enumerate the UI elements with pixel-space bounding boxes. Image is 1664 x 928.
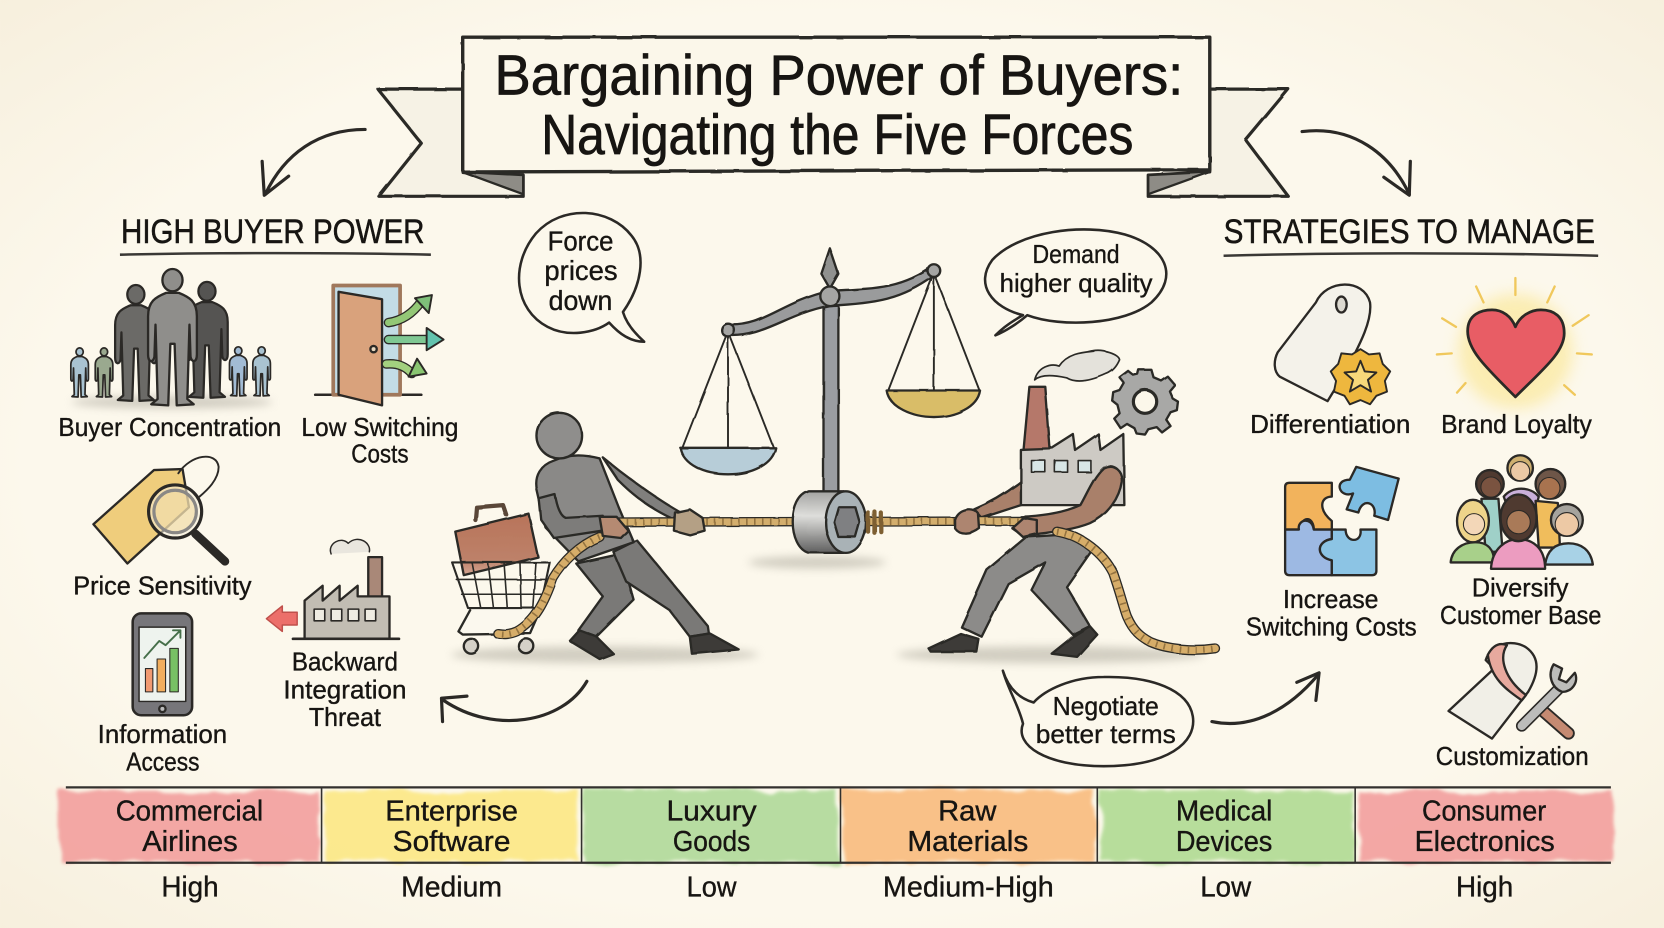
speech bubble: force prices down: prices	[544, 255, 618, 286]
label: backward integration threat	[283, 647, 406, 732]
illustration: factory-headed supplier figure	[929, 351, 1178, 657]
label: differentiation: Differentiation	[1250, 409, 1410, 439]
arrow: banner to strategies	[1302, 131, 1410, 195]
speech bubble: force prices down: Force	[548, 225, 613, 256]
speech bubble: negotiate better terms: better terms	[1036, 719, 1176, 749]
illustration: shopping cart with briefcase	[452, 505, 550, 654]
column: luxury goods	[666, 795, 757, 904]
label: increase switching costs: Switching Costs	[1246, 612, 1417, 642]
column: commercial airlines: High	[161, 872, 219, 904]
label: customization: Customization	[1436, 741, 1589, 771]
column: commercial airlines: Airlines	[142, 826, 238, 858]
heading: high buyer power: HIGH BUYER POWER	[121, 213, 425, 251]
buyer near arm	[539, 495, 603, 538]
icon: factory with red arrow	[266, 539, 399, 639]
table rules	[66, 787, 1611, 863]
illustration: metal hub on rope	[793, 491, 881, 553]
illustration: hands gripping rope	[600, 509, 1037, 538]
title text	[495, 43, 1183, 166]
speech bubble: negotiate better terms: Negotiate	[1053, 691, 1159, 721]
column: medical devices	[1176, 795, 1272, 904]
column: medical devices: Low	[1200, 872, 1251, 904]
supplier gear	[1112, 370, 1178, 435]
speech bubble: force prices down	[519, 213, 644, 342]
supplier smoke	[1035, 351, 1120, 381]
column: raw materials	[883, 795, 1054, 904]
column: enterprise software: Enterprise	[385, 795, 518, 827]
label: low switching costs: Low Switching	[301, 412, 458, 442]
ground shadows	[451, 556, 1204, 663]
column: luxury goods: Goods	[673, 826, 750, 858]
buyer far arm	[603, 457, 679, 519]
label: price sensitivity: Price Sensitivity	[73, 570, 252, 600]
label: low switching costs	[301, 412, 458, 469]
label: information access	[98, 719, 227, 776]
icon: buyer concentration people	[71, 269, 273, 409]
column: enterprise software: Software	[393, 826, 510, 858]
speech bubble: force prices down: down	[549, 285, 612, 316]
supplier chimney	[1024, 387, 1050, 450]
column: luxury goods: Luxury	[666, 795, 757, 827]
label: brand loyalty: Brand Loyalty	[1441, 409, 1592, 439]
arrow: toward increase switching costs	[1212, 673, 1319, 723]
label: diversify customer base: Customer Base	[1440, 600, 1601, 630]
column: raw materials: Materials	[907, 826, 1028, 858]
label: backward integration threat: Integration	[283, 674, 406, 704]
speech bubble: negotiate better terms	[1003, 671, 1193, 766]
icon: tag with star badge	[1275, 285, 1390, 404]
supplier shoes	[929, 626, 1097, 657]
illustration: rope	[498, 521, 1215, 650]
supplier factory head	[1021, 434, 1124, 505]
heading: strategies to manage: STRATEGIES TO MANAGE	[1224, 213, 1595, 251]
column: consumer electronics: Consumer	[1422, 795, 1547, 827]
supplier windows	[1032, 461, 1091, 472]
column: medical devices: Medical	[1176, 795, 1272, 827]
table: industry buyer power	[61, 787, 1613, 904]
buyer torso	[536, 455, 634, 561]
label: backward integration threat: Backward	[292, 647, 398, 677]
illustration: buyer figure pulling rope	[536, 413, 739, 659]
icon: puzzle pieces	[1285, 467, 1399, 575]
supplier far arm	[974, 482, 1021, 518]
column: raw materials: Raw	[938, 795, 997, 827]
label: buyer concentration: Buyer Concentration	[58, 412, 281, 442]
title banner	[378, 37, 1288, 196]
supplier legs	[961, 534, 1091, 637]
panel: strategies to manage	[1246, 278, 1601, 771]
icon: heart with glow	[1437, 278, 1592, 409]
icon: smartphone with chart	[133, 613, 192, 715]
speech bubble: demand higher quality	[985, 229, 1166, 335]
icon: tag with wrench and hammer	[1449, 643, 1576, 739]
column: enterprise software: Medium	[401, 872, 502, 904]
speech bubble: demand higher quality: Demand	[1033, 239, 1120, 269]
industry colour washes	[61, 791, 1613, 863]
title text: Navigating the Five Forces	[541, 103, 1133, 166]
column: consumer electronics: High	[1456, 872, 1513, 904]
column: consumer electronics	[1415, 795, 1555, 904]
speech bubble: demand higher quality: higher quality	[1000, 268, 1152, 298]
column: medical devices: Devices	[1176, 826, 1272, 858]
label: low switching costs: Costs	[351, 439, 409, 469]
label: increase switching costs	[1246, 584, 1417, 642]
icon: open door with arrows	[315, 285, 444, 405]
icon: diverse customer group	[1451, 455, 1593, 569]
label: information access: Access	[126, 746, 200, 776]
label: increase switching costs: Increase	[1283, 584, 1379, 614]
scale left pan	[680, 331, 776, 474]
scale right pan	[887, 273, 980, 417]
illustration: balance scale	[680, 248, 980, 497]
buyer head	[536, 413, 582, 458]
icon: price tag with magnifier	[93, 457, 225, 563]
arrow: toward backward integration	[441, 681, 587, 722]
column: consumer electronics: Electronics	[1415, 826, 1555, 858]
label: information access: Information	[98, 719, 227, 749]
label: backward integration threat: Threat	[309, 702, 382, 732]
supplier near arm	[1012, 466, 1122, 536]
panel: high buyer power factors	[58, 269, 458, 776]
buyer legs	[570, 540, 739, 659]
column: raw materials: Medium-High	[883, 872, 1054, 904]
label: diversify customer base: Diversify	[1472, 572, 1568, 602]
arrow: banner to high buyer power	[262, 129, 365, 195]
column: commercial airlines: Commercial	[116, 795, 263, 827]
column: enterprise software	[385, 795, 518, 904]
column: commercial airlines	[116, 795, 263, 904]
label: diversify customer base	[1440, 572, 1601, 630]
column: luxury goods: Low	[687, 872, 737, 904]
title text: Bargaining Power of Buyers:	[495, 43, 1183, 106]
